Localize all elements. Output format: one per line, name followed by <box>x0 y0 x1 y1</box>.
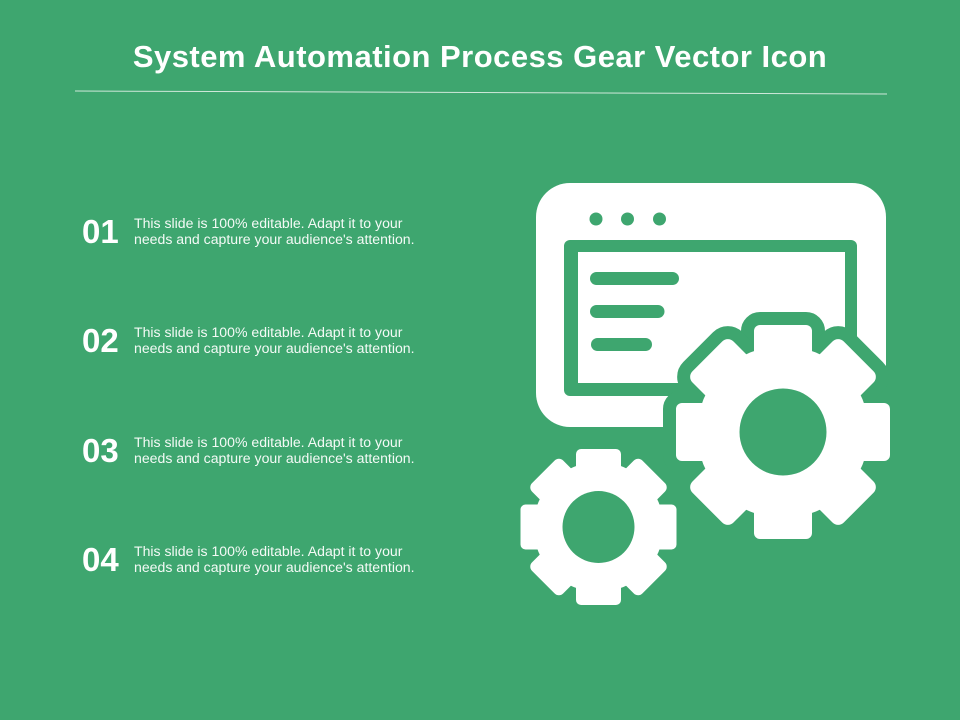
item 02: 02 <box>82 322 119 359</box>
icon: browser window <box>536 183 895 432</box>
item 03 <box>82 432 415 469</box>
title: System Automation Process Gear Vector Icon <box>133 39 827 74</box>
item 01 <box>82 213 415 250</box>
item 03: 03 <box>82 432 119 469</box>
icon: small gear <box>520 449 676 605</box>
item 01: This slide is 100% editable. Adapt it to your <box>134 214 402 230</box>
item 04: 04 <box>82 541 119 578</box>
item 03: This slide is 100% editable. Adapt it to your <box>134 434 402 450</box>
item 04: This slide is 100% editable. Adapt it to your <box>134 542 402 558</box>
item 01: 01 <box>82 213 119 250</box>
item 01: needs and capture your audience's attention. <box>134 231 415 247</box>
item 03: needs and capture your audience's attention. <box>134 450 415 466</box>
item 04 <box>82 541 415 578</box>
item 02: needs and capture your audience's attention. <box>134 340 415 356</box>
icon: large gear <box>676 325 890 539</box>
item 02 <box>82 322 415 359</box>
item 04: needs and capture your audience's attention. <box>134 559 415 575</box>
item 02: This slide is 100% editable. Adapt it to your <box>134 324 402 340</box>
